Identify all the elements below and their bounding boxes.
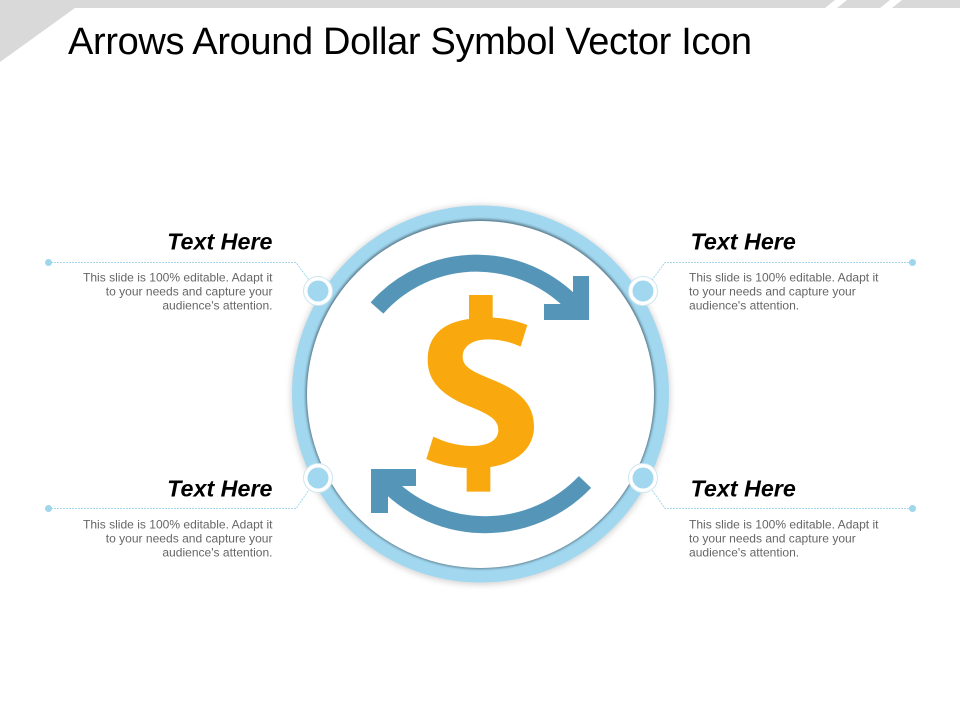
node: bottom left bbox=[304, 464, 332, 492]
callout: top left: audience's attention. bbox=[162, 298, 272, 312]
callout: bottom left: to your needs and capture your bbox=[106, 532, 272, 546]
icon: dollar sign bbox=[426, 295, 534, 492]
callout: top left: This slide is 100% editable. Adapt it bbox=[83, 270, 273, 284]
callout: bottom right: to your needs and capture your bbox=[689, 532, 856, 546]
callout: top right: Text Here bbox=[690, 228, 796, 254]
icon: circular arrows bbox=[371, 263, 589, 525]
central ring bbox=[290, 205, 670, 585]
callout: bottom right: audience's attention. bbox=[689, 546, 799, 560]
callout: bottom left: Text Here bbox=[167, 476, 273, 502]
node: top right bbox=[628, 276, 658, 306]
callout: top left: to your needs and capture your bbox=[106, 284, 272, 298]
top arrow bbox=[377, 263, 589, 320]
callout: top left bbox=[45, 228, 309, 312]
callout: top right: audience's attention. bbox=[689, 298, 799, 312]
node: bottom right bbox=[628, 464, 658, 492]
callout: top right: to your needs and capture your bbox=[689, 284, 856, 298]
callout: bottom right: This slide is 100% editable. Adapt it bbox=[689, 518, 879, 532]
bottom arrow bbox=[371, 469, 585, 525]
callout: bottom right bbox=[652, 476, 916, 560]
top decorative band bbox=[0, 0, 960, 62]
node: top left bbox=[304, 276, 332, 306]
callout: top left: Text Here bbox=[167, 228, 273, 254]
callout: bottom left: This slide is 100% editable. Adapt it bbox=[83, 518, 273, 532]
callout: bottom left bbox=[45, 476, 309, 560]
title: Arrows Around Dollar Symbol Vector Icon bbox=[68, 21, 752, 63]
callout: top right: This slide is 100% editable. Adapt it bbox=[689, 270, 879, 284]
callout: bottom left: audience's attention. bbox=[162, 546, 272, 560]
callout: top right bbox=[652, 228, 916, 312]
callout: bottom right: Text Here bbox=[690, 476, 796, 502]
